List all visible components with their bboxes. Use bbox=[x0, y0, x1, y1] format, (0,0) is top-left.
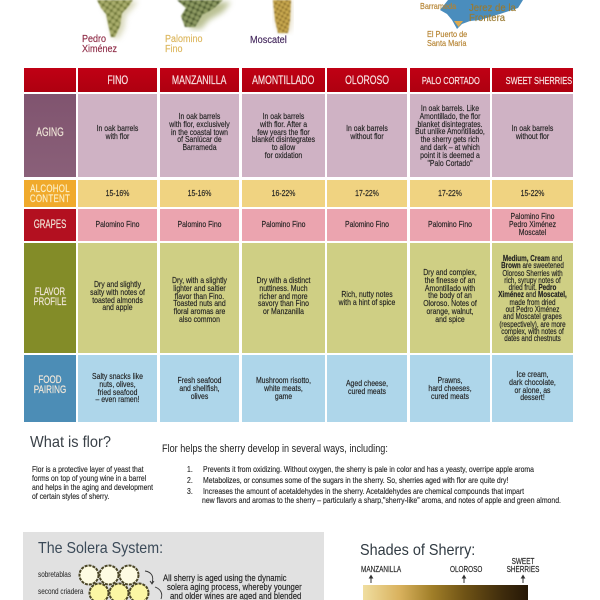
map of sherry region bbox=[420, 0, 523, 48]
food: Fino bbox=[78, 355, 157, 422]
row label: Alcohol content: CONTENT bbox=[30, 193, 70, 205]
map label: Jerez de la Frontera bbox=[469, 3, 516, 24]
flavor: Sweet Sherries: (respectively), are more bbox=[499, 320, 566, 329]
aging: Manzanilla: of Sanlúcar de bbox=[177, 134, 222, 144]
header: Oloroso bbox=[327, 68, 407, 92]
label: Sweet Sherries: SHERRIES bbox=[507, 565, 539, 574]
food: Sweet Sherries bbox=[492, 355, 573, 422]
alcohol: Fino: 15-16% bbox=[106, 188, 129, 198]
label: Sweet Sherries: SWEET bbox=[512, 557, 534, 566]
header corner bbox=[24, 68, 76, 92]
label: Manzanilla: MANZANILLA bbox=[361, 565, 401, 574]
flavor: Manzanilla: Toasted nuts and bbox=[173, 298, 226, 308]
heading: The Solera System: The Solera System: bbox=[38, 540, 163, 557]
header: Manzanilla: MANZANILLA bbox=[172, 75, 227, 87]
aging: Palo Cortado: and dark – at which bbox=[420, 142, 480, 152]
flor definition: of certain styles of sherry. bbox=[32, 491, 109, 501]
flavor: Manzanilla bbox=[160, 243, 239, 353]
row label: Aging bbox=[24, 94, 76, 177]
food: Manzanilla: and shellfish, bbox=[179, 383, 220, 393]
map label: Barrameda: Barrameda bbox=[420, 1, 456, 11]
map label: Jerez de la Frontera: Jerez de la bbox=[469, 3, 516, 14]
header: Fino bbox=[78, 68, 157, 92]
flavor: Sweet Sherries: out Pedro Ximénez bbox=[506, 305, 559, 314]
flavor: Palo Cortado: Oloroso. Notes of bbox=[423, 298, 477, 308]
aging: Fino bbox=[78, 94, 157, 177]
label: Pedro Ximenez: Pedro bbox=[82, 34, 106, 45]
food: Manzanilla: olives bbox=[191, 391, 208, 401]
food: Amontillado: Mushroom risotto, bbox=[256, 375, 311, 385]
aging: Amontillado bbox=[242, 94, 325, 177]
label: Pedro Ximenez bbox=[82, 34, 117, 55]
flavor: Oloroso bbox=[327, 243, 407, 353]
item 3: Increases the amount of acetaldehydes in the sherry. Acetaldehydes are chemical compounds that impart bbox=[203, 486, 524, 496]
aging: Fino: In oak barrels bbox=[97, 123, 138, 133]
tick arrows bbox=[368, 574, 526, 583]
alcohol: Palo Cortado bbox=[410, 180, 490, 207]
aging: Amontillado: few years the flor bbox=[257, 127, 310, 137]
row label: Food pairing: FOOD bbox=[38, 374, 62, 386]
flavor: Palo Cortado: the finesse of an bbox=[425, 275, 475, 285]
food: Sweet Sherries: Ice cream, bbox=[516, 369, 549, 379]
grapes: Palo Cortado bbox=[410, 209, 490, 241]
flavor: Fino: salty with notes of bbox=[90, 287, 145, 297]
flavor: Sweet Sherries: dates and chestnuts bbox=[504, 334, 561, 343]
map label: El Puerto de Santa Maria bbox=[427, 29, 467, 48]
grapes: Oloroso: Palomino Fino bbox=[345, 219, 389, 229]
flavor: Sweet Sherries: dried fruit. Pedro bbox=[509, 283, 556, 292]
map label: El Puerto de Santa Maria: El Puerto de bbox=[427, 29, 467, 39]
label: sobretablas: sobretablas bbox=[38, 570, 71, 579]
row label: Grapes: GRAPES bbox=[34, 219, 66, 231]
row label: Flavor profile: PROFILE bbox=[34, 296, 66, 308]
grapes: Sweet Sherries bbox=[492, 209, 573, 241]
row label: Flavor profile bbox=[24, 243, 76, 353]
flavor: Amontillado: richer and more bbox=[259, 291, 308, 301]
flavor: Palo Cortado bbox=[410, 243, 490, 353]
food: Palo Cortado: Prawns, bbox=[438, 375, 462, 385]
aging: Manzanilla: with flor, exclusively bbox=[169, 119, 230, 129]
flor definition: Flor is a protective layer of yeast that bbox=[32, 464, 144, 474]
label: Moscatel: Moscatel bbox=[250, 35, 287, 46]
map label: El Puerto de Santa Maria: Santa Maria bbox=[427, 38, 466, 48]
heading: What is flor?: What is flor? bbox=[30, 434, 111, 451]
panel: shades of sherry bbox=[360, 542, 540, 600]
food: Fino: nuts, olives, bbox=[99, 379, 136, 389]
row label: Alcohol content: ALCOHOL bbox=[30, 183, 70, 195]
aging: Amontillado: for oxidation bbox=[265, 150, 302, 160]
flavor: Fino bbox=[78, 243, 157, 353]
grapes: Manzanilla: Palomino Fino bbox=[177, 219, 222, 229]
row label: Grapes bbox=[24, 209, 76, 241]
flor definition bbox=[32, 464, 153, 501]
label: Sweet Sherries bbox=[506, 557, 540, 574]
food: Palo Cortado: hard cheeses, bbox=[428, 383, 472, 393]
item 2: 2. bbox=[187, 475, 193, 485]
flavor: Fino: toasted almonds bbox=[92, 295, 143, 305]
grape cluster illustrations bbox=[96, 0, 294, 41]
flor definition: forms on top of young wine in a barrel bbox=[32, 473, 146, 483]
aging: Palo Cortado: "Palo Cortado" bbox=[427, 158, 473, 168]
grapes: Manzanilla bbox=[160, 209, 239, 241]
row label: Flavor profile: FLAVOR bbox=[35, 286, 65, 298]
grapes: Fino bbox=[78, 209, 157, 241]
flavor: Palo Cortado: the body of an bbox=[428, 290, 472, 300]
flavor: Palo Cortado: Amontillado with bbox=[425, 283, 475, 293]
food: Sweet Sherries: dark chocolate, bbox=[509, 377, 556, 387]
flavor: Manzanilla: also common bbox=[179, 314, 220, 324]
flavor: Palo Cortado: Dry and complex, bbox=[423, 267, 477, 277]
label: Pedro Ximenez: Ximénez bbox=[82, 44, 117, 55]
item 3: 3. bbox=[187, 486, 193, 496]
food: Amontillado: white meats, bbox=[264, 383, 303, 393]
grapes: Sweet Sherries: Palomino Fino bbox=[510, 211, 555, 221]
food: Palo Cortado bbox=[410, 355, 490, 422]
food: Oloroso: Aged cheese, bbox=[346, 378, 388, 388]
aging: Sweet Sherries: without flor bbox=[516, 131, 549, 141]
flavor: Manzanilla: flavor than Fino. bbox=[175, 291, 224, 301]
what is flor section bbox=[30, 434, 561, 505]
aging: Manzanilla: Barrameda bbox=[182, 142, 217, 152]
flavor: Sweet Sherries: Oloroso Sherries with bbox=[502, 269, 563, 278]
grapes: Fino: Palomino Fino bbox=[95, 219, 140, 229]
item 1: Prevents it from oxidizing. Without oxygen, the sherry is pale in color and has a yeasty, overripe apple aroma bbox=[203, 464, 534, 474]
solera description bbox=[163, 573, 302, 600]
row label: Food pairing bbox=[24, 355, 76, 422]
aging: Amontillado: blanket disintegrates bbox=[252, 134, 315, 144]
aging: Amontillado: to allow bbox=[272, 142, 295, 152]
aging: Palo Cortado: the sherry gets rich bbox=[421, 134, 479, 144]
header: Palo Cortado: PALO CORTADO bbox=[422, 75, 480, 87]
aging: Palo Cortado: In oak barrels. Like bbox=[421, 103, 479, 113]
flavor: Palo Cortado: orange, walnut, bbox=[426, 306, 474, 316]
aging: Amontillado: In oak barrels bbox=[263, 111, 304, 121]
aging: Palo Cortado: Amontillado, the flor bbox=[420, 111, 480, 121]
alcohol: Sweet Sherries bbox=[492, 180, 573, 207]
flavor: Sweet Sherries: Brown are sweetened bbox=[501, 261, 564, 270]
heading: Shades of Sherry: Shades of Sherry: bbox=[360, 542, 475, 559]
header: Fino: FINO bbox=[107, 75, 128, 87]
subheading: flor helps: Flor helps the sherry develop in several ways, including: bbox=[162, 443, 388, 455]
flavor: Sweet Sherries: complex, with notes of bbox=[501, 327, 564, 336]
flavor: Amontillado: nuttiness. Much bbox=[259, 283, 308, 293]
flavor: Oloroso: Rich, nutty notes bbox=[341, 289, 393, 299]
aging: Oloroso bbox=[327, 94, 407, 177]
label: second criadera: second criadera bbox=[38, 587, 83, 596]
barrel stack bbox=[78, 564, 162, 600]
food: Oloroso bbox=[327, 355, 407, 422]
food: Oloroso: cured meats bbox=[348, 386, 386, 396]
flavor: Oloroso: with a hint of spice bbox=[339, 297, 395, 307]
flavor: Manzanilla: Dry, with a slightly bbox=[172, 275, 227, 285]
aging: Palo Cortado bbox=[410, 94, 490, 177]
grapes: Amontillado: Palomino Fino bbox=[261, 219, 306, 229]
alcohol: Oloroso: 17-22% bbox=[355, 188, 379, 198]
alcohol: Amontillado: 16-22% bbox=[272, 188, 295, 198]
grapes: Oloroso bbox=[327, 209, 407, 241]
flavor: Amontillado: savory than Fino bbox=[258, 298, 309, 308]
alcohol: Manzanilla bbox=[160, 180, 239, 207]
flavor: Sweet Sherries bbox=[492, 243, 573, 353]
label: Palomino Fino bbox=[165, 34, 203, 55]
food: Sweet Sherries: or alone, as bbox=[515, 385, 550, 395]
flor benefits list bbox=[187, 464, 561, 505]
label: Palomino Fino: Palomino bbox=[165, 34, 203, 45]
flavor: Sweet Sherries: and Moscatel grapes bbox=[503, 312, 562, 321]
item 2: Metabolizes, or consumes some of the sugars in the sherry. So, sherries aged with flor are quite dry! bbox=[203, 475, 508, 485]
food: Fino: fried seafood bbox=[98, 387, 137, 397]
food: Amontillado bbox=[242, 355, 325, 422]
row label: Alcohol content bbox=[24, 180, 76, 207]
flavor: Amontillado bbox=[242, 243, 325, 353]
aging: Manzanilla: In oak barrels bbox=[179, 111, 220, 121]
aging: Palo Cortado: But unlike Amontillado, bbox=[415, 126, 485, 136]
flavor: Manzanilla: floral aromas are bbox=[174, 306, 225, 316]
item 3 continued: new flavors and aromas to the sherry – particularly a sharp,"sherry-like" aroma, and notes of apple and green almond. bbox=[202, 495, 561, 505]
food: Fino: – even ramen! bbox=[95, 394, 140, 404]
alcohol: Oloroso bbox=[327, 180, 407, 207]
flavor: Sweet Sherries: Ximénez and Moscatel, bbox=[498, 290, 567, 299]
header: Manzanilla bbox=[160, 68, 239, 92]
grape varieties bbox=[82, 0, 294, 55]
header: Amontillado: AMONTILLADO bbox=[252, 75, 315, 87]
flavor: Sweet Sherries: made from dried bbox=[510, 298, 555, 307]
alcohol: Palo Cortado: 17-22% bbox=[438, 188, 462, 198]
flavor: Manzanilla: lighter and saltier bbox=[173, 283, 226, 293]
flavor: Amontillado: Dry with a distinct bbox=[257, 275, 310, 285]
food: Palo Cortado: cured meats bbox=[431, 391, 469, 401]
alcohol: Amontillado bbox=[242, 180, 325, 207]
flor definition: and helps in the aging and development bbox=[32, 482, 153, 492]
aging: Sweet Sherries bbox=[492, 94, 573, 177]
row label: Food pairing: PAIRING bbox=[34, 384, 66, 396]
description line 2: solera aging process, whereby younger bbox=[167, 582, 302, 592]
label: Oloroso: OLOROSO bbox=[450, 565, 482, 574]
row label: Aging: AGING bbox=[36, 127, 64, 139]
header: Palo Cortado bbox=[410, 68, 490, 92]
alcohol: Fino bbox=[78, 180, 157, 207]
header: Sweet Sherries: SWEET SHERRIES bbox=[506, 75, 572, 87]
header: Amontillado bbox=[242, 68, 325, 92]
aging: Manzanilla bbox=[160, 94, 239, 177]
food: Sweet Sherries: dessert! bbox=[520, 392, 545, 402]
colour gradient bar bbox=[363, 585, 528, 600]
description line 1: All sherry is aged using the dynamic bbox=[163, 573, 287, 583]
grapes: Amontillado bbox=[242, 209, 325, 241]
header: Sweet Sherries bbox=[492, 68, 573, 92]
food: Amontillado: game bbox=[275, 391, 292, 401]
flavor: Sweet Sherries: Medium, Cream and bbox=[503, 254, 562, 263]
aging: Fino: with flor bbox=[106, 131, 129, 141]
grapes: Sweet Sherries: Moscatel bbox=[519, 227, 546, 237]
comparison table bbox=[24, 68, 573, 422]
label: Palomino Fino: Fino bbox=[165, 44, 183, 55]
flavor: Palo Cortado: and spice bbox=[435, 314, 465, 324]
food: Manzanilla: Fresh seafood bbox=[177, 375, 222, 385]
grapes: Palo Cortado: Palomino Fino bbox=[428, 219, 472, 229]
food: Fino: Salty snacks like bbox=[92, 371, 143, 381]
header: Oloroso: OLOROSO bbox=[345, 75, 389, 87]
alcohol: Sweet Sherries: 15-22% bbox=[521, 188, 544, 198]
aging: Oloroso: without flor bbox=[350, 131, 384, 141]
aging: Manzanilla: in the coastal town bbox=[171, 127, 228, 137]
item 1: 1. bbox=[187, 464, 193, 474]
food: Manzanilla bbox=[160, 355, 239, 422]
aging: Oloroso: In oak barrels bbox=[346, 123, 388, 133]
grapes: Sweet Sherries: Pedro Ximénez bbox=[509, 219, 556, 229]
flavor: Sweet Sherries: rich, syrupy notes of bbox=[504, 276, 561, 285]
flavor: Amontillado: or Manzanilla bbox=[263, 306, 304, 316]
alcohol: Manzanilla: 15-16% bbox=[188, 188, 211, 198]
aging: Amontillado: with flor. After a bbox=[260, 119, 307, 129]
map shape bbox=[440, 0, 523, 29]
aging: Palo Cortado: blanket disintegrates. bbox=[417, 119, 483, 129]
flavor: Fino: and apple bbox=[102, 302, 133, 312]
aging: Sweet Sherries: In oak barrels bbox=[512, 123, 553, 133]
map label: Jerez de la Frontera: Frontera bbox=[469, 12, 505, 24]
flavor: Fino: Dry and slightly bbox=[94, 279, 141, 289]
panel: the solera system bbox=[23, 532, 324, 600]
aging: Palo Cortado: point it is deemed a bbox=[420, 150, 480, 160]
